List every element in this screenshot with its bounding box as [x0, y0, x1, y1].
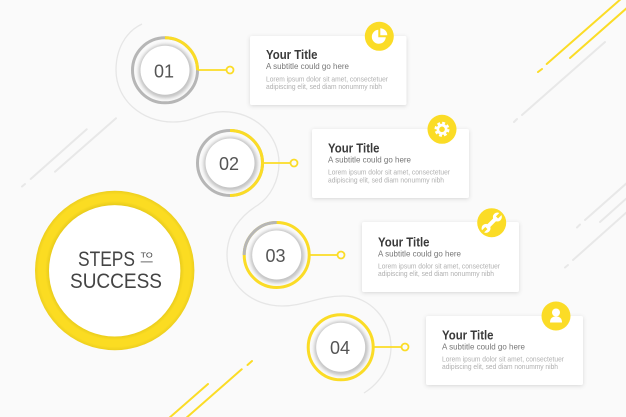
card 03 title: Your Title: [378, 236, 430, 250]
icon: gear: [428, 115, 456, 144]
card 03 body: [378, 262, 500, 278]
card 01 title: Your Title: [266, 48, 318, 62]
card 01: [250, 36, 406, 105]
heading: steps: STEPS: [78, 248, 135, 271]
icon: pie chart: [365, 22, 394, 51]
card 01 body: Lorem ipsum dolor sit amet, consectetuer: [266, 74, 388, 84]
card 03: [362, 222, 519, 292]
card 04 subtitle: A subtitle could go here: [442, 342, 525, 352]
number 04: 04: [330, 338, 350, 358]
card 02: [312, 129, 469, 198]
card 02 title: Your Title: [328, 142, 380, 156]
card 04 body: adipiscing elit, sed diam nonummy nibh: [442, 362, 558, 371]
card 03 body: adipiscing elit, sed diam nonummy nibh: [378, 269, 494, 278]
step 01 progress ring: [132, 38, 198, 103]
card 01 subtitle: A subtitle could go here: [266, 61, 349, 71]
heading: to: [141, 250, 153, 262]
card 03 body: Lorem ipsum dolor sit amet, consectetuer: [378, 262, 500, 270]
step 02 progress ring: [198, 130, 262, 196]
heading: to: TO: [141, 250, 153, 260]
step 02 connector: [263, 160, 298, 166]
number 03: 03: [265, 246, 286, 266]
number 02: 02: [219, 154, 239, 174]
card 02 body: Lorem ipsum dolor sit amet, consectetuer: [328, 168, 450, 176]
card 04 title: Your Title: [442, 328, 494, 342]
card 01 body: adipiscing elit, sed diam nonummy nibh: [266, 82, 382, 91]
number 01: 01: [154, 62, 174, 82]
step 01 connector: [198, 66, 234, 74]
icon: user: [542, 302, 570, 330]
card 01 body: [266, 74, 388, 91]
card 03 subtitle: A subtitle could go here: [378, 248, 461, 258]
card 04 body: Lorem ipsum dolor sit amet, consectetuer: [442, 354, 564, 364]
card 04 body: [442, 354, 564, 371]
step 04 connector: [374, 344, 408, 350]
winding connector path: [116, 24, 391, 393]
step 04 progress ring: [308, 315, 373, 380]
icon: wrench: [477, 208, 506, 237]
card 02 body: adipiscing elit, sed diam nonummy nibh: [328, 176, 444, 184]
heading: success: SUCCESS: [70, 270, 162, 293]
step 03 connector: [310, 252, 344, 258]
central circle: steps to success: [35, 191, 194, 350]
card 02 subtitle: A subtitle could go here: [328, 154, 411, 164]
step 03 progress ring: [244, 222, 309, 288]
card 02 body: [328, 168, 450, 184]
card 04: [426, 316, 583, 385]
